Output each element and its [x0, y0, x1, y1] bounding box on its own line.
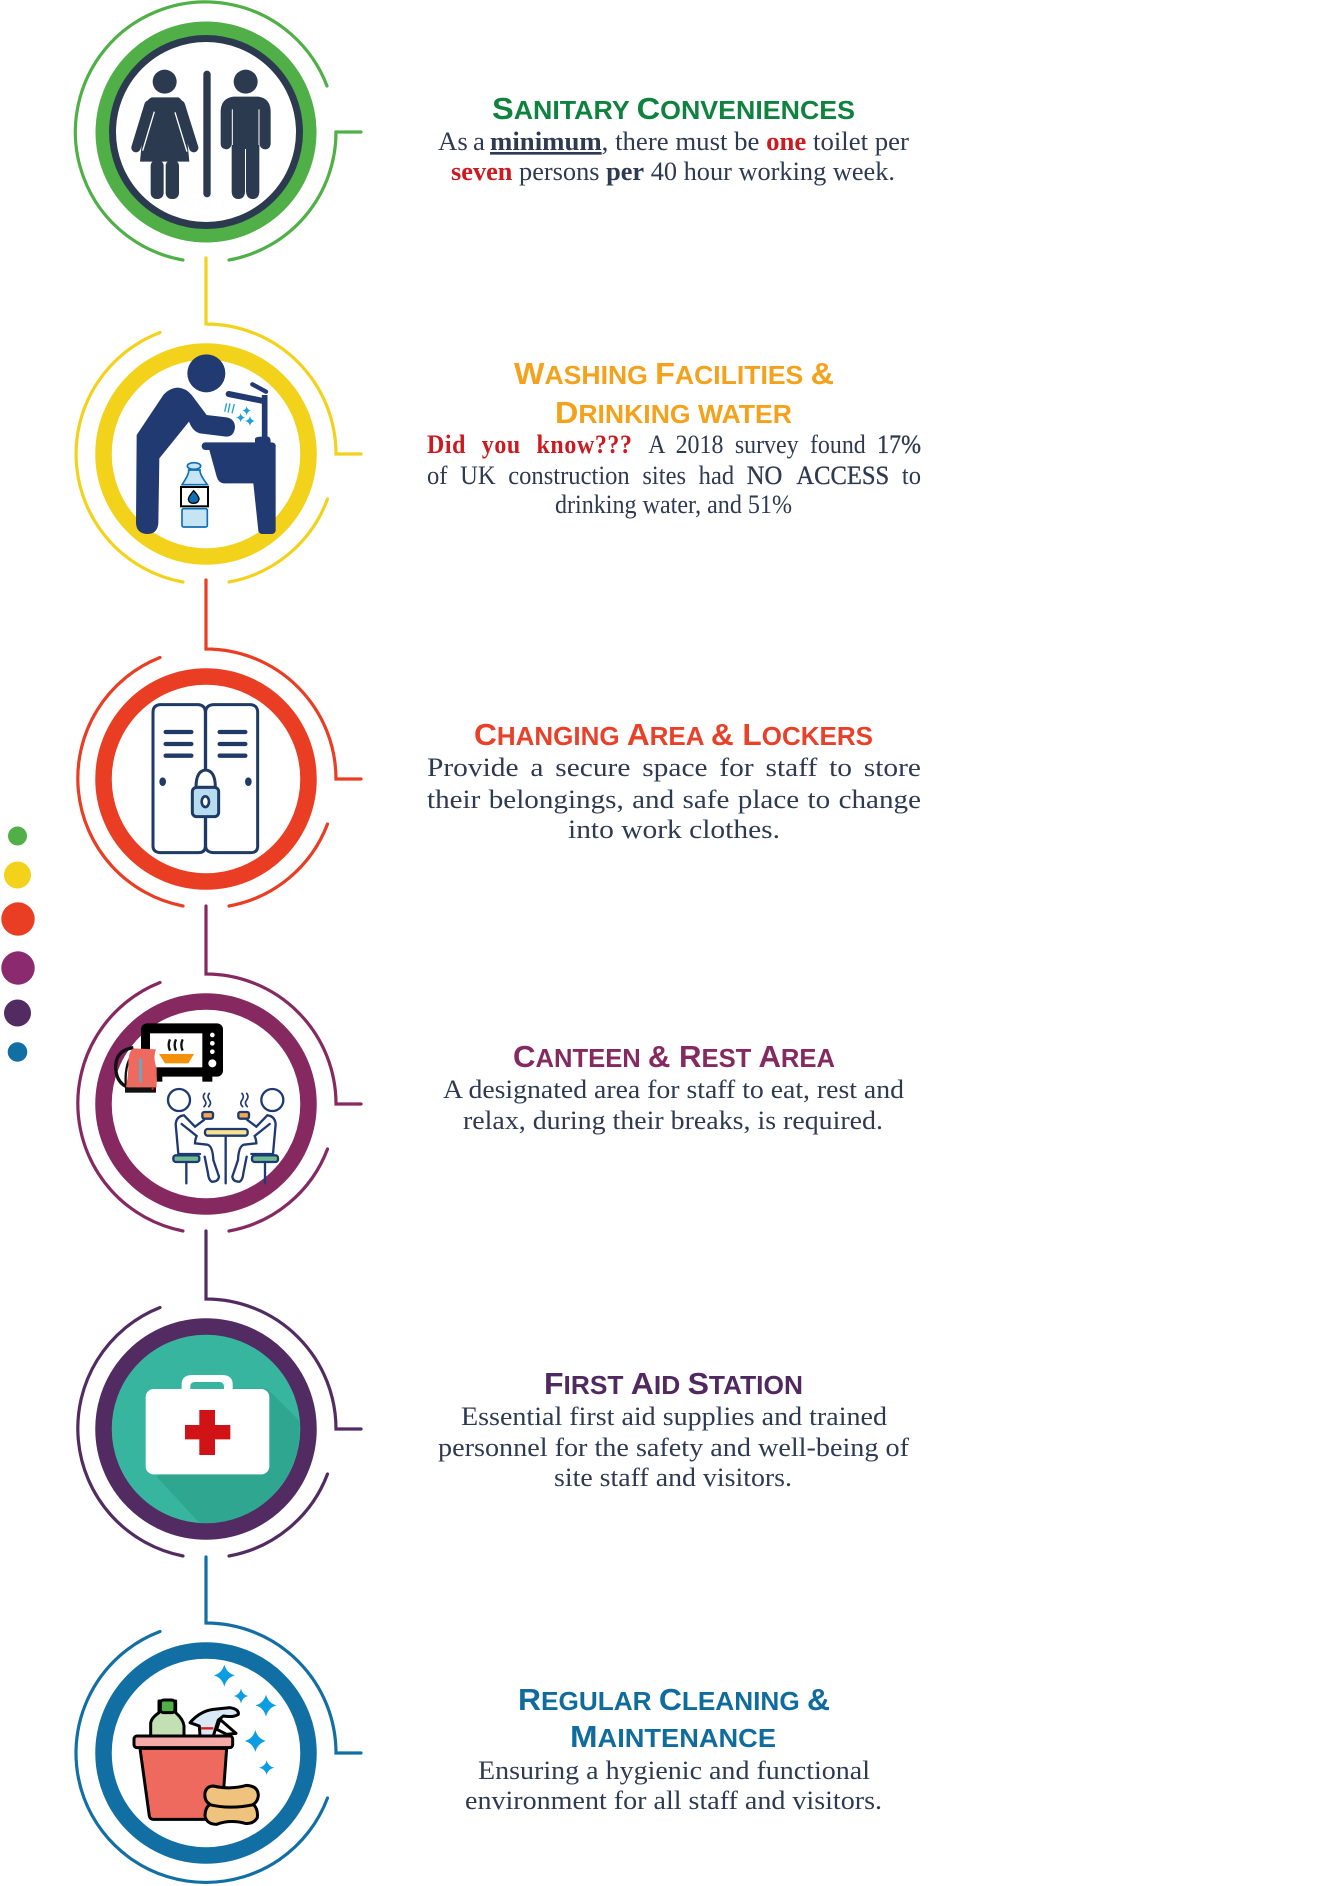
text block: of UK construction sites had NO ACCESS to [427, 460, 921, 490]
text block: personnel for the safety and well-being of [438, 1432, 909, 1462]
icon: two people at table [168, 1089, 283, 1183]
text block: Essential first aid supplies and trained [461, 1401, 887, 1431]
icon: first aid kit [146, 1375, 300, 1523]
heading [514, 356, 834, 430]
ring: purple arcs and connector [78, 1231, 361, 1556]
text block: site staff and visitors. [554, 1462, 792, 1492]
text block [438, 1401, 909, 1492]
ring: red thick circle [104, 676, 308, 882]
text block: As a minimum, there must be one toilet per [438, 126, 909, 156]
text block: Did you know??? A 2018 survey found 17% [427, 429, 921, 459]
ring: magenta arcs and connector [78, 906, 361, 1231]
ring: yellow arcs and connector [76, 258, 361, 582]
ring: yellow thick circle [104, 352, 308, 556]
text block [443, 1074, 904, 1135]
ring: purple thick circle with teal fill [104, 1326, 308, 1532]
heading: SANITARY CONVENIENCES [492, 91, 855, 126]
heading: REGULAR CLEANING & [518, 1682, 830, 1717]
text block: drinking water, and 51% [555, 489, 792, 519]
panel: canteen and rest area [78, 906, 904, 1231]
ring: blue arcs and connector [76, 1557, 361, 1882]
text block [465, 1755, 882, 1815]
text block [427, 429, 921, 519]
ring: magenta thick circle [104, 1002, 308, 1206]
text block: environment for all staff and visitors. [465, 1785, 882, 1815]
panel: first aid station [78, 1231, 909, 1567]
icon: toilet man and woman [136, 70, 271, 199]
panel: sanitary conveniences [75, 2, 909, 260]
heading: FIRST AID STATION [544, 1366, 803, 1401]
heading: CHANGING AREA & LOCKERS [474, 717, 873, 752]
text block: their belongings, and safe place to change [427, 784, 921, 814]
heading: DRINKING WATER [555, 395, 792, 430]
text block: into work clothes. [568, 814, 780, 844]
ring: green arcs [75, 2, 361, 260]
text block: Ensuring a hygienic and functional [478, 1755, 870, 1785]
text block: Provide a secure space for staff to store [427, 752, 921, 782]
icon: water bottle [181, 463, 208, 527]
text block: relax, during their breaks, is required. [463, 1105, 883, 1135]
icon: microwave [141, 1023, 223, 1082]
icon: kettle [116, 1048, 157, 1093]
heading: CANTEEN & REST AREA [513, 1039, 835, 1074]
text block [438, 126, 909, 186]
icon: lockers with padlock [153, 705, 258, 853]
icon: sparkles [214, 1665, 277, 1775]
text block: A designated area for staff to eat, rest and [443, 1074, 904, 1104]
text block [427, 752, 921, 844]
heading [518, 1682, 830, 1754]
icon: person washing hands [136, 354, 276, 534]
panel: regular cleaning and maintenance [76, 1557, 882, 1882]
text block: seven persons per 40 hour working week. [451, 156, 895, 186]
ring: blue thick circle [104, 1650, 308, 1856]
legend: coloured side dots [1, 826, 35, 1062]
heading: MAINTENANCE [570, 1719, 776, 1754]
panel: washing facilities and drinking water [76, 258, 921, 582]
heading: WASHING FACILITIES & [514, 356, 834, 391]
ring: red arcs and connector [78, 580, 361, 906]
panel: changing area and lockers [78, 580, 921, 906]
ring: green thick circle [102, 28, 310, 236]
icon: cleaning bucket with bottle, spray and sponge [134, 1700, 258, 1824]
